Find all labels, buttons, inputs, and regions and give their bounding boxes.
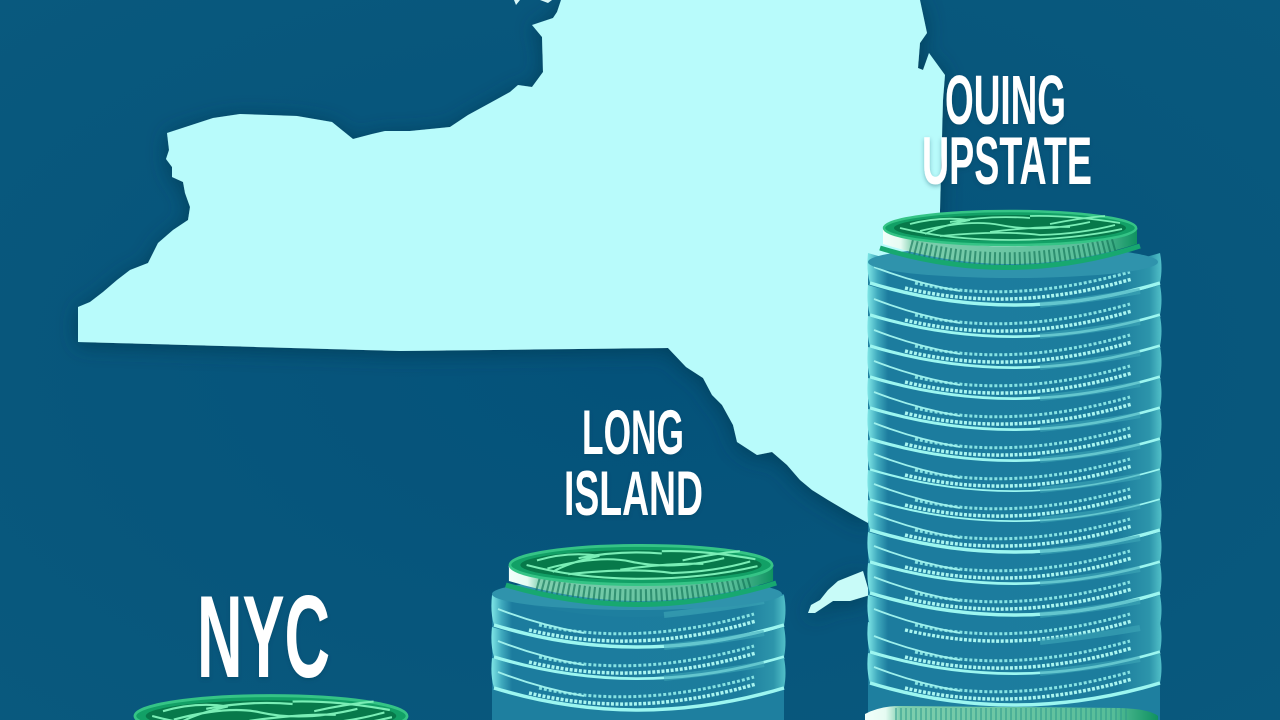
label: NYC: NYC	[197, 571, 330, 702]
coin: green top coin of Upstate stack	[880, 211, 1140, 268]
label: Upstate heading	[922, 61, 1092, 199]
label: Long Island: LONG	[582, 398, 684, 468]
label: Long Island	[564, 398, 703, 529]
coin stack: Long Island	[491, 545, 786, 720]
coin: green top coin of Long Island stack	[506, 545, 776, 605]
map: Long Island	[808, 571, 870, 613]
label: Long Island: ISLAND	[564, 459, 703, 529]
map: New York State silhouette	[78, 0, 945, 613]
coin: green top coin of NYC stack	[135, 696, 407, 720]
coin stack: Upstate	[865, 211, 1162, 720]
coin: bottom ribbed edge of Upstate stack	[865, 706, 1158, 720]
label: Upstate heading: UPSTATE	[922, 123, 1092, 199]
specks: northern map tip	[514, 0, 552, 5]
label: Upstate heading: OUING	[945, 61, 1066, 139]
